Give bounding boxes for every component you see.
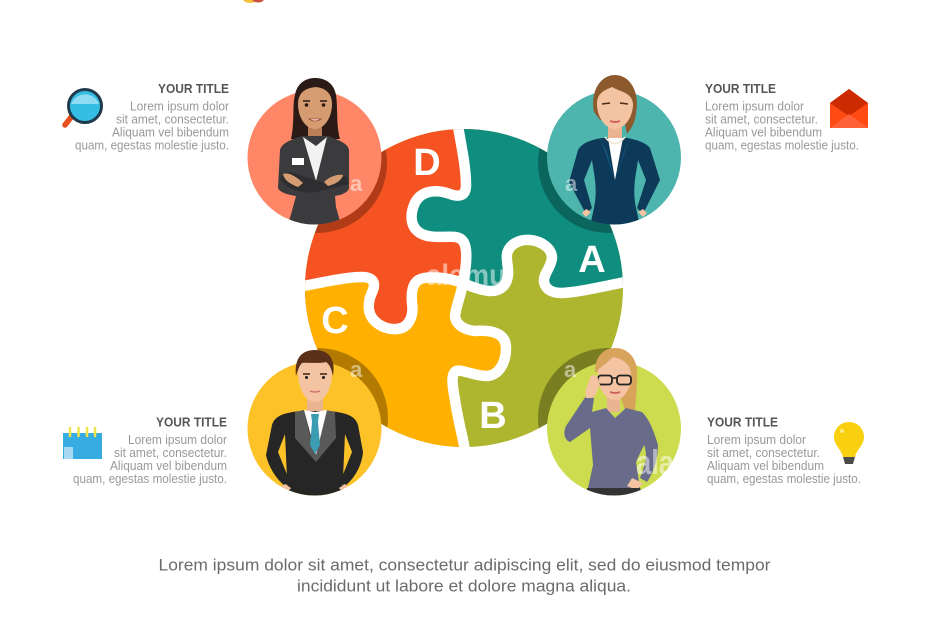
- icon: magnifying glass: [65, 90, 102, 125]
- letter B: B: [479, 395, 507, 437]
- text block: bottom left: Aliquam vel bibendum: [110, 459, 227, 473]
- avatar B: woman with glasses: ala: [636, 444, 675, 482]
- piece B olive: [300, 125, 630, 455]
- watermark: alamu: [426, 259, 506, 292]
- avatar D: woman with crossed arms: [248, 78, 382, 225]
- text block: top right: YOUR TITLE: [705, 82, 776, 96]
- text block: top right: Aliquam vel bibendum: [705, 126, 822, 140]
- text block: bottom left: Lorem ipsum dolor: [128, 433, 227, 447]
- text block: top right: [705, 82, 859, 152]
- text block: bottom right: quam, egestas molestie justo.: [707, 472, 861, 486]
- caption: Lorem ipsum dolor sit amet, consectetur adipiscing elit, sed do eiusmod tempor: [158, 556, 771, 574]
- avatar shadows: [315, 150, 387, 233]
- icon: light bulb: [834, 422, 864, 464]
- white seams between pieces: [298, 120, 630, 455]
- piece A teal: [416, 129, 623, 288]
- text block: bottom right: Aliquam vel bibendum: [707, 459, 824, 473]
- text block: top left: quam, egestas molestie justo.: [75, 138, 229, 152]
- letter C: C: [321, 300, 349, 342]
- decorative cropped mark at top edge: [243, 0, 264, 3]
- avatar A: woman in navy suit: [547, 75, 681, 226]
- caption: [158, 556, 771, 596]
- avatar C: man in black suit: a: [350, 357, 363, 382]
- avatar B: woman with glasses: [547, 348, 681, 500]
- text block: bottom right: Lorem ipsum dolor: [707, 433, 806, 447]
- text block: bottom right: YOUR TITLE: [707, 416, 778, 430]
- text block: top left: YOUR TITLE: [158, 82, 229, 96]
- avatar C: man in black suit: [248, 350, 382, 500]
- icon: notepad: [63, 428, 102, 459]
- text block: top right: Lorem ipsum dolor: [705, 100, 804, 114]
- icon: envelope: [830, 89, 868, 128]
- piece D orange: [305, 129, 480, 345]
- avatar D: woman with crossed arms: a: [350, 171, 363, 196]
- caption: incididunt ut labore et dolore magna aliqua.: [297, 578, 631, 596]
- piece C yellow: [305, 282, 501, 447]
- text block: top right: sit amet, consectetur.: [705, 112, 818, 126]
- letter D: D: [413, 142, 441, 184]
- text block: top left: Lorem ipsum dolor: [130, 100, 229, 114]
- avatar B: woman with glasses: a: [564, 357, 577, 382]
- text block: top left: [75, 82, 229, 152]
- text block: top left: sit amet, consectetur.: [116, 112, 229, 126]
- text block: bottom right: sit amet, consectetur.: [707, 446, 820, 460]
- text block: bottom left: [73, 416, 227, 486]
- text block: top right: quam, egestas molestie justo.: [705, 138, 859, 152]
- text block: bottom right: [707, 416, 861, 486]
- puzzle circle: [305, 129, 623, 447]
- letter A: A: [578, 239, 606, 281]
- avatar A: woman in navy suit: a: [565, 171, 578, 196]
- text block: bottom left: quam, egestas molestie justo.: [73, 472, 227, 486]
- text block: bottom left: sit amet, consectetur.: [114, 446, 227, 460]
- text block: top left: Aliquam vel bibendum: [112, 126, 229, 140]
- text block: bottom left: YOUR TITLE: [156, 416, 227, 430]
